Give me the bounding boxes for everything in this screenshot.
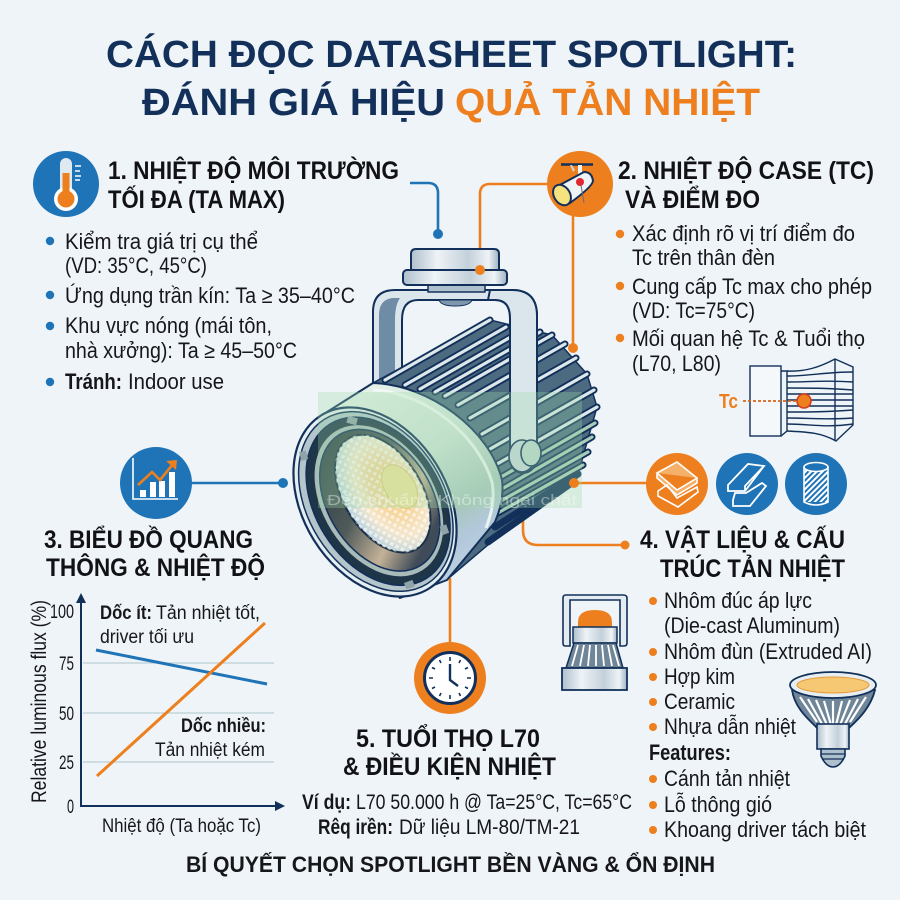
heading	[618, 155, 874, 214]
heading: THÔNG & NHIỆT ĐỘ	[46, 552, 265, 582]
mount cap	[428, 284, 485, 292]
bullet list: Nhôm đùn (Extruded AI)	[664, 639, 872, 664]
bullet list: Nhôm đúc áp lực	[664, 588, 812, 613]
connector lines	[190, 183, 648, 644]
line chart: driver tối ưu	[100, 627, 194, 648]
heading: 4. VẬT LIỆU & CẤU	[640, 524, 845, 554]
bullet list: nhà xưởng): Ta ≥ 45–50°C	[65, 338, 297, 363]
housing	[320, 383, 503, 598]
footer tagline: BÍ QUYẾT CHỌN SPOTLIGHT BỀN VÀNG & ỔN ĐỊNH	[186, 852, 715, 877]
line chart: Dốc ít:	[100, 603, 152, 624]
bullet list	[649, 588, 872, 842]
spotlight illustration	[260, 249, 597, 627]
heading	[343, 723, 556, 781]
title	[106, 32, 797, 124]
line chart: 0	[67, 797, 74, 818]
line chart: 100	[50, 602, 74, 623]
bullet list: (VD: 35°C, 45°C)	[65, 253, 207, 278]
panel 4: materials and structure	[562, 453, 876, 842]
bullet list	[616, 221, 872, 376]
bullet list: Cánh tản nhiệt	[664, 766, 790, 791]
diagram: Tc measuring point: Tc	[719, 391, 738, 413]
bullet list: Kiểm tra giá trị cụ thể	[65, 229, 258, 254]
panel 1: ambient temperature	[33, 151, 399, 394]
line chart: Dốc nhiều:	[181, 716, 266, 737]
heading	[640, 524, 845, 583]
line chart	[28, 593, 285, 837]
panel 5: L70 lifetime	[302, 642, 632, 839]
bullet list: Features:	[649, 740, 731, 765]
heading: 2. NHIỆT ĐỘ CASE (TC)	[618, 155, 874, 185]
bullet list: Hợp kim	[664, 664, 735, 689]
title: CÁCH ĐỌC DATASHEET SPOTLIGHT:	[106, 32, 797, 76]
heading	[108, 155, 399, 214]
lens ring	[260, 377, 490, 627]
heat sink fins	[373, 320, 597, 577]
icon: growth chart	[120, 447, 192, 519]
line chart: 75	[59, 654, 74, 675]
icon: clock	[414, 642, 486, 714]
panel 3: luminous flux chart	[28, 447, 285, 837]
panel 2: case temperature	[547, 151, 874, 441]
bullet list: Ceramic	[664, 689, 735, 714]
example text: L70 50.000 h @ Ta=25°C, Tc=65°C	[356, 791, 632, 814]
bracket left arm	[373, 290, 537, 462]
heading: 1. NHIỆT ĐỘ MÔI TRƯỜNG	[108, 155, 399, 185]
icon: die-cast plates	[646, 453, 708, 515]
bullet list: Ứng dụng trần kín: Ta ≥ 35–40°C	[65, 283, 355, 308]
line chart: Tản nhiệt tốt,	[156, 603, 260, 624]
bullet list: Cung cấp Tc max cho phép	[632, 274, 872, 299]
title: ĐÁNH GIÁ HIỆU	[142, 80, 445, 124]
bullet list	[46, 229, 355, 394]
bullet list: Khoang driver tách biệt	[664, 817, 866, 842]
bullet list: (Die-cast Aluminum)	[664, 613, 840, 638]
title: QUẢ TẢN NHIỆT	[455, 80, 760, 124]
example text	[302, 791, 632, 839]
bullet list: Indoor use	[128, 369, 224, 394]
watermark: Đèn chuẩn - Không ngại chất	[327, 492, 578, 509]
line chart: Nhiệt độ (Ta hoặc Tc)	[102, 816, 261, 837]
example text: Dữ liệu LM-80/TM-21	[399, 816, 580, 839]
icon: ceramic cylinder	[785, 453, 847, 515]
heading: VÀ ĐIỂM ĐO	[625, 185, 760, 214]
heading: 3. BIỂU ĐỒ QUANG	[44, 524, 253, 554]
diagram: Tc measuring point	[719, 359, 853, 441]
bullet list: Xác định rõ vị trí điểm đo	[632, 221, 855, 246]
bracket right arm	[488, 290, 537, 473]
line chart: Tản nhiệt kém	[155, 740, 265, 761]
bullet list: Lỗ thông gió	[664, 792, 772, 817]
bullet list: (L70, L80)	[632, 351, 721, 376]
example text: Rêq irền:	[318, 816, 393, 839]
bullet list: Khu vực nóng (mái tôn,	[65, 313, 272, 338]
line chart: 50	[59, 704, 74, 725]
bullet list: Tc trên thân đèn	[632, 245, 775, 270]
heading	[44, 524, 265, 582]
watermark	[318, 392, 582, 509]
ring tabs	[299, 416, 449, 590]
line chart: 25	[59, 753, 74, 774]
icon: thermometer	[33, 151, 99, 217]
heading: TRÚC TẢN NHIỆT	[660, 553, 845, 583]
heading: TỐI ĐA (TA MAX)	[108, 184, 285, 214]
heading: & ĐIỀU KIỆN NHIỆT	[343, 751, 556, 781]
icon: extruded bars	[716, 453, 778, 515]
bullet list: Nhựa dẫn nhiệt	[664, 714, 796, 739]
icon: track spot	[547, 151, 613, 217]
icon: small spotlight cross-section	[562, 595, 627, 690]
bullet list: (VD: Tc=75°C)	[632, 298, 755, 323]
bullet list: Tránh:	[65, 369, 122, 394]
line chart: Relative luminous flux (%)	[28, 600, 51, 803]
heading: 5. TUỔI THỌ L70	[356, 723, 540, 753]
bullet list: Mối quan hệ Tc & Tuổi thọ	[632, 326, 865, 351]
pivot bolt	[509, 440, 535, 472]
icon: PAR lamp	[790, 672, 876, 767]
example text: Ví dụ:	[302, 791, 351, 814]
